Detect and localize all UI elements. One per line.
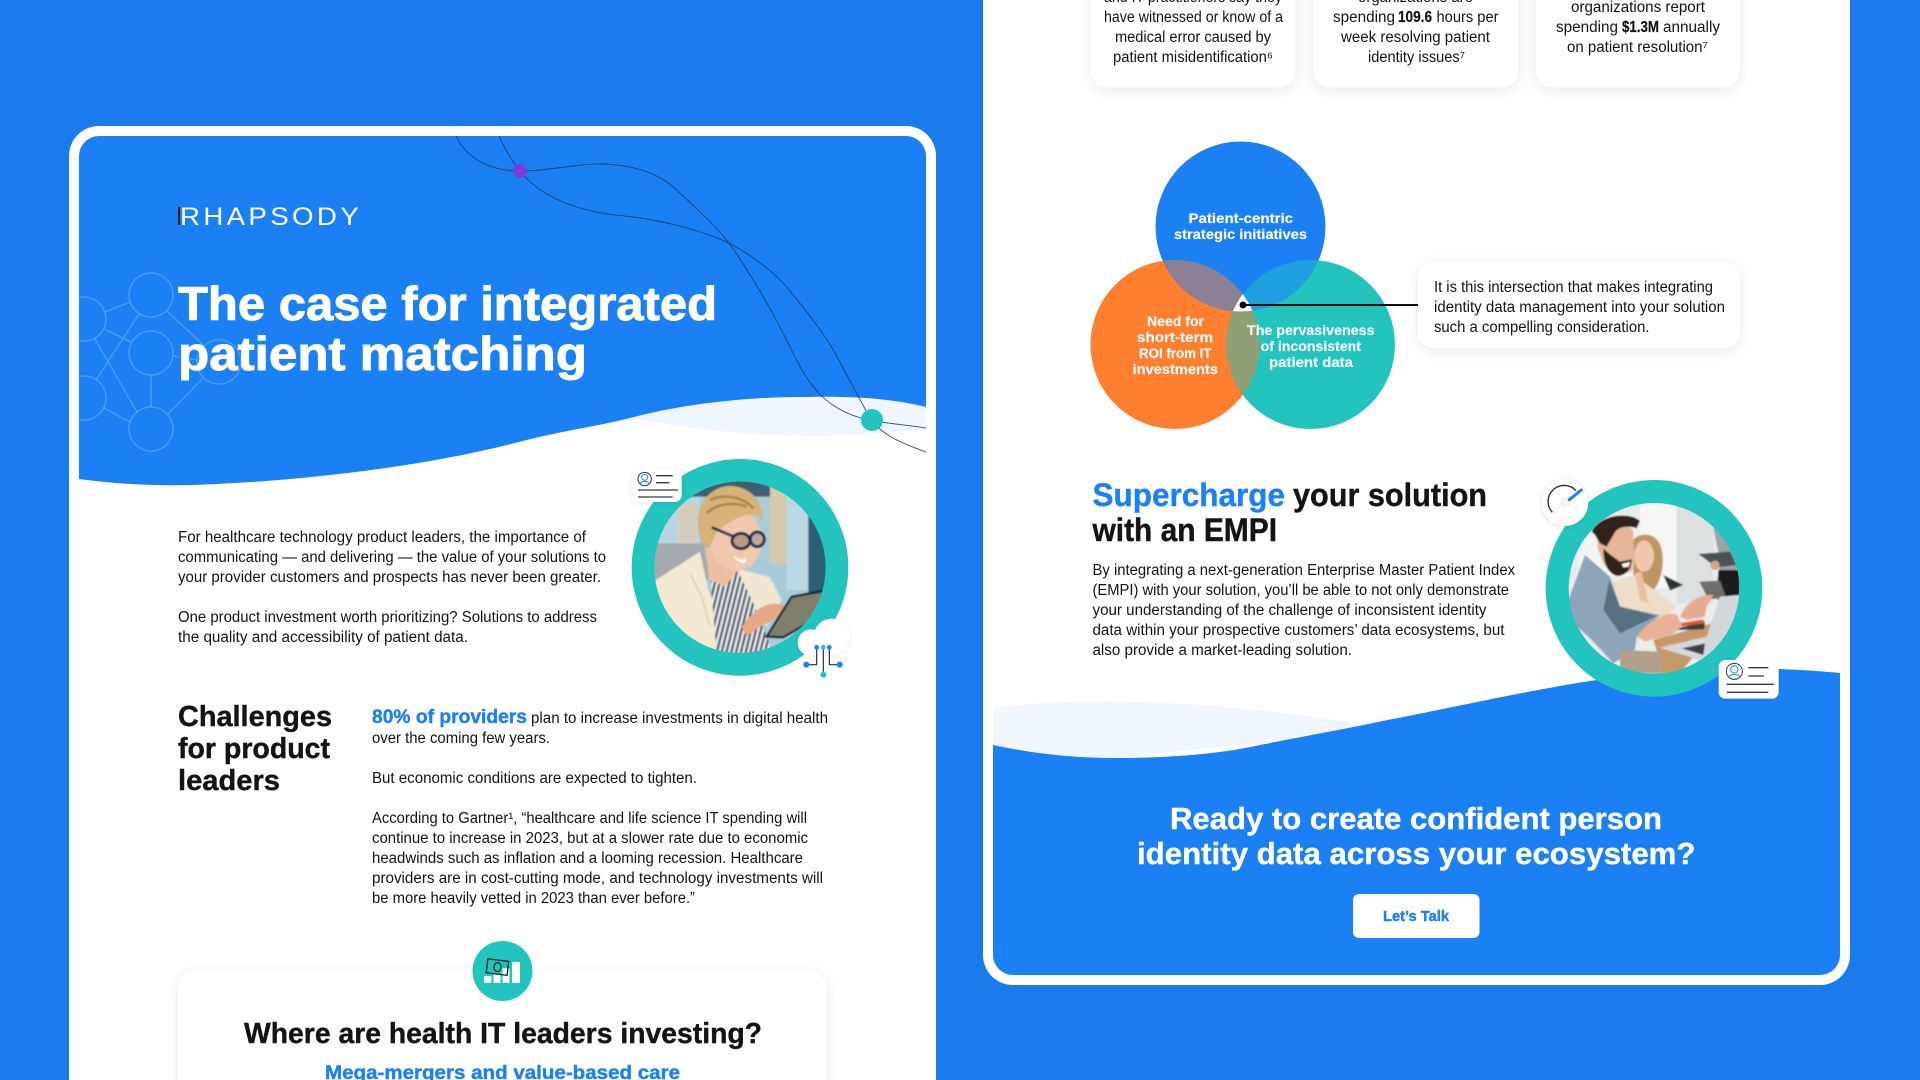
- light wave band: [993, 702, 1390, 770]
- text block: challenges body: headwinds such as inflation and a looming recession. Healthcare: [372, 850, 803, 867]
- footer heading: Ready to create confident person: [1170, 801, 1662, 836]
- text block: challenges body: over the coming few years.: [372, 730, 550, 747]
- stat card 2: [1313, 0, 1518, 88]
- footer heading: [1137, 801, 1696, 871]
- heading: supercharge: with an EMPI: [1092, 512, 1277, 548]
- intro text: [178, 529, 606, 646]
- network graphic: [62, 273, 241, 451]
- venn label: short-term ROI: investments: [1132, 361, 1218, 377]
- venn label: short-term ROI: short-term: [1137, 329, 1213, 345]
- text block: EMPI body: [1092, 562, 1515, 659]
- footer wave panel: [993, 669, 1840, 975]
- photo: woman with tablet: [632, 459, 850, 678]
- heading: supercharge: your solution: [1293, 477, 1487, 513]
- button: let's talk: Let’s Talk: [1383, 909, 1450, 925]
- stat card 3: spending: [1556, 19, 1618, 36]
- panel: left infographic page: [62, 126, 936, 1080]
- venn label: inconsistent data: of inconsistent: [1261, 338, 1361, 354]
- icon: patient ID card: [1719, 660, 1779, 699]
- stat card 2: 109.6: [1398, 9, 1432, 26]
- text block: EMPI body: your understanding of the challenge of inconsistent identity: [1092, 602, 1487, 619]
- panel: right infographic page: [983, 0, 1850, 985]
- callout: such a compelling consideration.: [1434, 319, 1650, 336]
- intro text: One product investment worth prioritizing? Solutions to address: [178, 609, 597, 626]
- icon: cloud network: [798, 619, 850, 678]
- stat card 3: annually: [1663, 19, 1720, 36]
- stat card 3: [1536, 0, 1740, 88]
- teal node: [861, 409, 883, 431]
- text block: EMPI body: data within your prospective customers’ data ecosystems, but: [1092, 622, 1505, 639]
- stat card 3: $1.3M: [1622, 19, 1659, 36]
- panel: where are health IT leaders investing: [178, 941, 827, 1080]
- stat card 1: have witnessed or know of a: [1104, 9, 1283, 26]
- intro text: the quality and accessibility of patient data.: [178, 629, 468, 646]
- intro text: For healthcare technology product leaders, the importance of: [178, 529, 587, 546]
- venn label: inconsistent data: patient data: [1269, 354, 1353, 370]
- stat card 2: hours per: [1436, 9, 1498, 26]
- heading: challenges: for product: [178, 733, 331, 765]
- stat card 2: spending: [1333, 9, 1395, 26]
- venn label: inconsistent data: The pervasiveness: [1247, 322, 1375, 338]
- text block: challenges body: continue to increase in 2023, but at a slower rate due to economic: [372, 830, 808, 847]
- venn label: patient-centric: [1174, 210, 1307, 242]
- callout: identity data management into your solution: [1434, 299, 1725, 316]
- connector curves: [456, 136, 926, 452]
- hero wave background: [79, 136, 926, 485]
- heading: challenges: [178, 701, 332, 797]
- text block: challenges body: 80% of providers: [372, 706, 527, 728]
- heading: challenges: leaders: [178, 765, 280, 797]
- venn diagram: [1090, 142, 1395, 429]
- photo: colleagues at laptop: [1542, 479, 1779, 699]
- title: [178, 277, 717, 380]
- heading: supercharge: [1092, 477, 1487, 548]
- connector line: [1240, 302, 1420, 308]
- text block: challenges body: [372, 706, 828, 907]
- stat card 1: patient misidentification⁶: [1113, 49, 1273, 66]
- purple node: [513, 164, 527, 178]
- light wave band: [625, 400, 926, 436]
- logo: RHAPSODY: [180, 203, 362, 231]
- venn label: inconsistent data: [1247, 322, 1375, 370]
- venn label: short-term ROI: [1132, 313, 1218, 377]
- intro text: communicating — and delivering — the value of your solutions to: [178, 549, 606, 566]
- venn label: patient-centric: Patient-centric: [1188, 210, 1293, 226]
- text block: challenges body: According to Gartner¹, “healthcare and life science IT spending will: [372, 810, 807, 827]
- heading: supercharge: Supercharge: [1092, 477, 1285, 513]
- stat card 1: [1091, 0, 1296, 88]
- heading: Where are health IT leaders investing?: [244, 1018, 762, 1050]
- stat card 2: week resolving patient: [1340, 29, 1491, 46]
- venn label: patient-centric: strategic initiatives: [1174, 226, 1307, 242]
- text block: challenges body: plan to increase investments in digital health: [531, 710, 828, 727]
- icon: patient ID card: [632, 469, 682, 502]
- title: patient matching: [178, 327, 587, 380]
- text block: EMPI body: (EMPI) with your solution, you’ll be able to not only demonstrate: [1092, 582, 1509, 599]
- text block: EMPI body: also provide a market-leading solution.: [1092, 642, 1352, 659]
- title: The case for integrated: [178, 277, 717, 330]
- stat card 3: on patient resolution⁷: [1567, 39, 1708, 56]
- callout: It is this intersection that makes integrating: [1434, 279, 1713, 296]
- intro text: your provider customers and prospects has never been greater.: [178, 569, 601, 586]
- button: let's talk: [1353, 894, 1480, 938]
- callout: [1418, 262, 1740, 348]
- icon: money and bars: [472, 941, 532, 1001]
- text block: challenges body: But economic conditions are expected to tighten.: [372, 770, 697, 787]
- heading: challenges: Challenges: [178, 701, 332, 733]
- footer heading: identity data across your ecosystem?: [1137, 836, 1696, 871]
- stat card 2: identity issues⁷: [1368, 49, 1465, 66]
- venn label: short-term ROI: ROI from IT: [1139, 345, 1212, 361]
- text block: challenges body: providers are in cost-cutting mode, and technology investments will: [372, 870, 823, 887]
- stat card 1: medical error caused by: [1115, 29, 1271, 46]
- venn label: short-term ROI: Need for: [1147, 313, 1205, 329]
- icon: gauge: [1542, 479, 1588, 526]
- text block: EMPI body: By integrating a next-generation Enterprise Master Patient Index: [1092, 562, 1515, 579]
- text block: challenges body: be more heavily vetted in 2023 than ever before.”: [372, 890, 695, 907]
